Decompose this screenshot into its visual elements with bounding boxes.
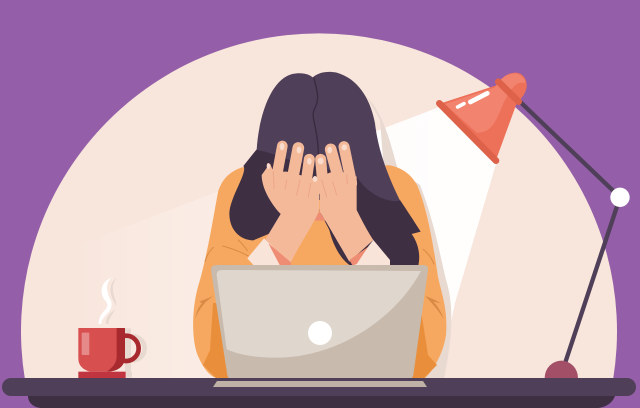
shade highlight xyxy=(445,73,525,133)
finger nails xyxy=(267,143,347,182)
hair top xyxy=(257,72,400,201)
laptop logo xyxy=(308,321,332,345)
table underside xyxy=(28,396,615,408)
left arm and palm xyxy=(262,163,319,264)
lamp joint xyxy=(610,188,630,207)
steam xyxy=(99,277,112,324)
lamp arm upper xyxy=(520,102,620,197)
saucer xyxy=(78,372,126,378)
person shadow xyxy=(367,97,451,378)
right arm and palm xyxy=(320,170,373,262)
finger creases xyxy=(273,172,347,197)
table top xyxy=(2,378,636,396)
shade rim xyxy=(439,103,496,161)
hair and hands xyxy=(205,72,434,266)
shade collar xyxy=(498,82,519,102)
fingers xyxy=(276,146,352,190)
right cuff xyxy=(353,240,390,266)
laptop lid xyxy=(211,265,428,381)
coffee cup xyxy=(78,277,145,378)
shirt xyxy=(193,165,446,378)
lamp base xyxy=(545,361,578,378)
lamp light beam xyxy=(75,106,496,378)
laptop screen highlight xyxy=(217,270,421,358)
cup shadow xyxy=(106,277,145,378)
shirt creases xyxy=(205,240,434,264)
hair parting xyxy=(313,78,318,155)
desk lamp xyxy=(439,73,630,378)
hair lower left xyxy=(229,149,290,240)
cup highlight xyxy=(82,333,89,355)
sleeve crease left xyxy=(195,296,213,319)
chin xyxy=(313,212,326,221)
cream arch backdrop xyxy=(21,33,617,380)
laptop foot xyxy=(213,381,427,387)
shirt dark fold left xyxy=(203,303,232,380)
lamp shade xyxy=(439,73,527,161)
cup dark side xyxy=(107,328,125,372)
cup body xyxy=(78,328,125,372)
hair behind fingers xyxy=(280,153,357,200)
left cuff xyxy=(247,238,291,266)
laptop xyxy=(195,265,444,381)
lamp arm lower xyxy=(565,197,620,363)
sleeve crease right xyxy=(425,296,444,319)
woman xyxy=(193,72,446,380)
shade shine xyxy=(470,93,487,102)
cup handle xyxy=(113,336,139,361)
shirt dark fold right xyxy=(410,310,437,378)
hair lower right xyxy=(319,160,421,265)
